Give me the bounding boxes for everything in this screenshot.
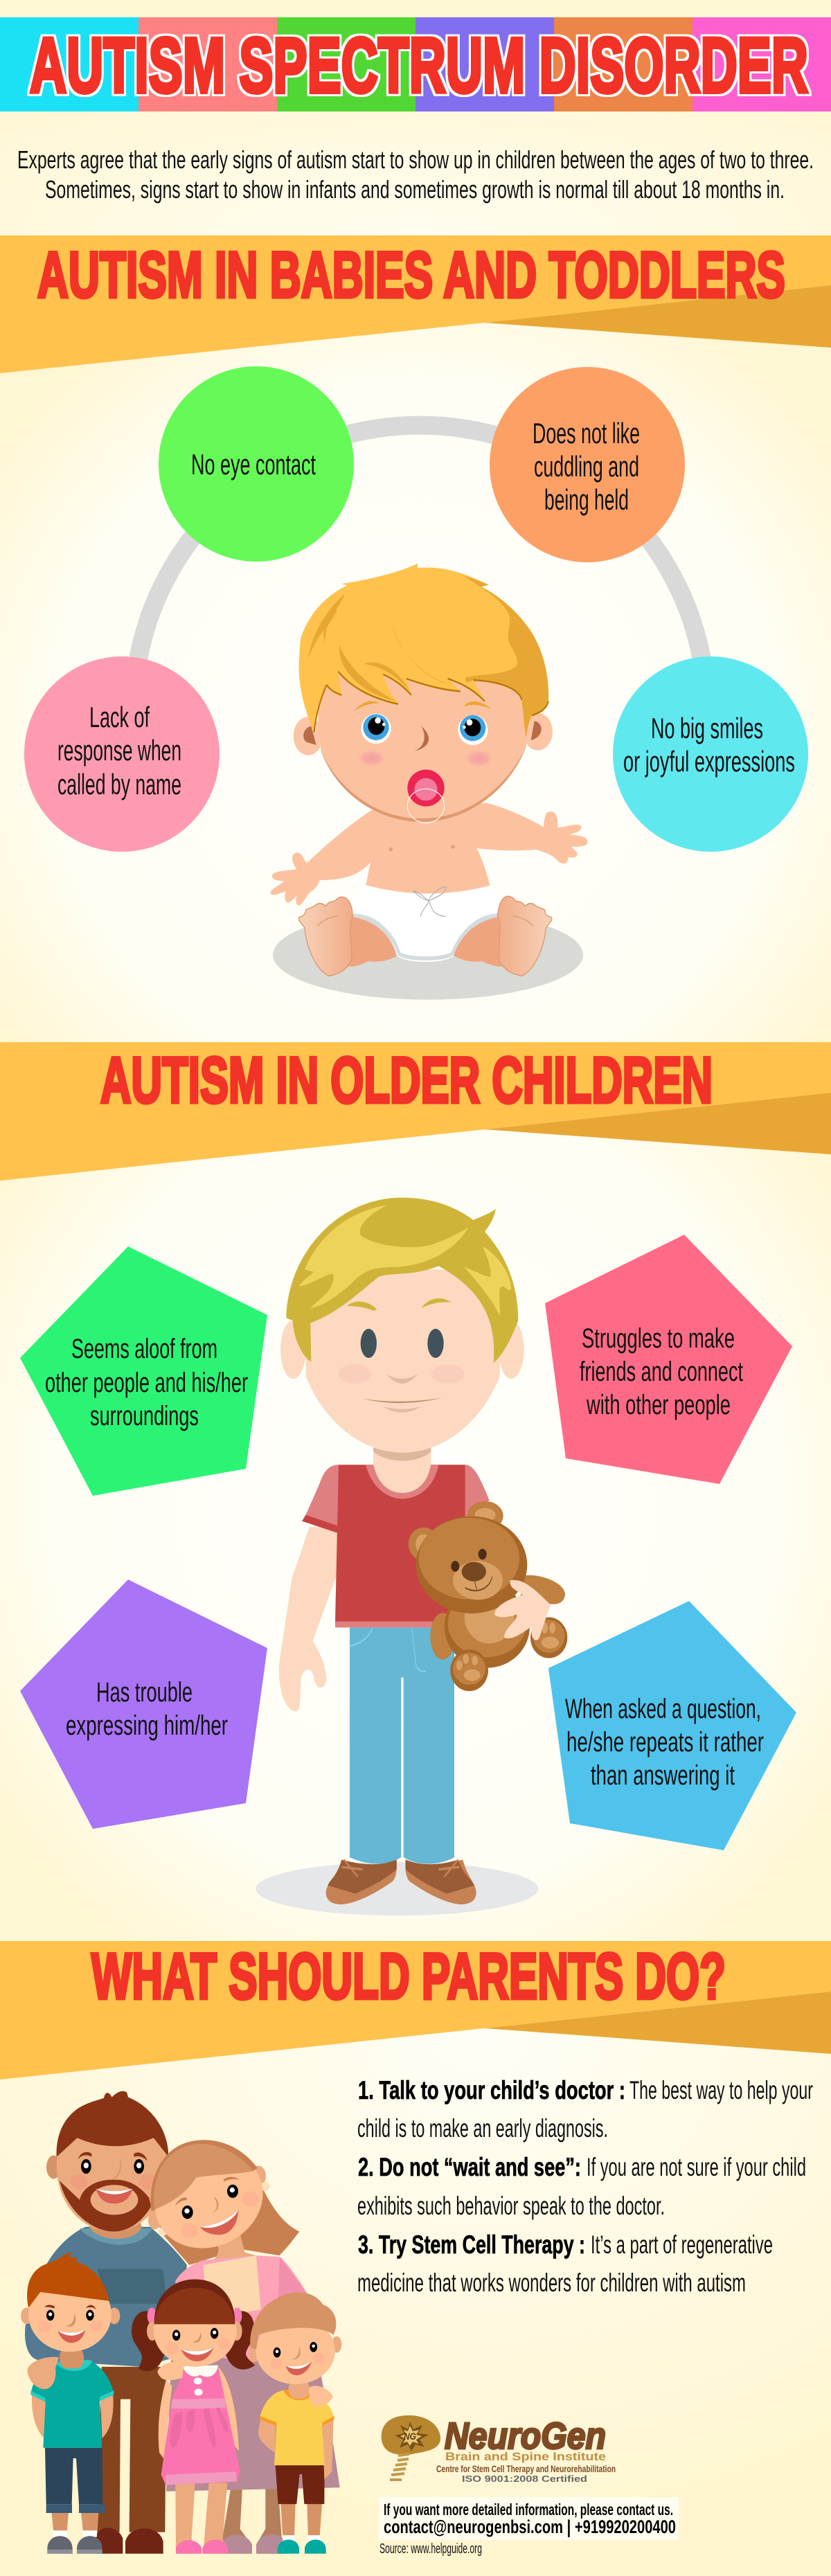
shoes — [326, 1860, 397, 1904]
title band — [0, 17, 831, 111]
mother — [148, 2140, 340, 2554]
feet — [299, 897, 352, 976]
eyebrows — [353, 701, 379, 712]
illustration: baby — [271, 563, 588, 1000]
icon: brain and spine — [382, 2415, 440, 2480]
cheeks — [355, 748, 388, 769]
item 3 — [357, 2230, 773, 2297]
illustration: family — [21, 2091, 341, 2554]
eyebrows — [347, 1298, 452, 1310]
pentagon: seems aloof — [20, 1246, 267, 1496]
hair — [299, 563, 548, 738]
trousers — [350, 1627, 454, 1864]
item 2: exhibits such behavior speak to the doctor. — [357, 2192, 665, 2220]
circle: does not like cuddling: being held — [544, 483, 629, 516]
legs — [344, 917, 397, 967]
nose — [414, 726, 429, 751]
pentagon: trouble expressing: Has trouble — [96, 1677, 193, 1708]
eyes — [361, 1329, 377, 1358]
pentagon: struggles to make friends: with other people — [586, 1390, 731, 1420]
hair — [286, 1197, 518, 1363]
source note: Source: www.helpguide.org — [379, 2541, 482, 2557]
logo: NeuroGen: Centre for Stem Cell Therapy and Neurorehabilitation — [436, 2463, 616, 2474]
pentagon: struggles to make friends — [545, 1235, 792, 1484]
circle: lack of response: response when — [57, 734, 181, 767]
item 1 — [357, 2076, 813, 2143]
circle: no eye contact: No eye contact — [191, 448, 316, 481]
face — [321, 746, 526, 822]
nose and mouth — [386, 1374, 418, 1384]
ears — [294, 717, 323, 755]
connecting arc — [138, 425, 702, 661]
pentagon: seems aloof: Seems aloof from — [71, 1334, 217, 1364]
teddy bear — [409, 1501, 567, 1691]
circle: does not like cuddling: cuddling and — [534, 450, 639, 483]
eyes — [361, 714, 391, 744]
collar and neck — [366, 1465, 438, 1499]
father's hand on shoulder — [27, 2357, 59, 2389]
pentagon: trouble expressing — [20, 1580, 267, 1829]
torso and arms — [271, 803, 588, 905]
contact box: If you want more detailed information, please contact us. — [384, 2501, 673, 2519]
contact box: contact@neurogenbsi.com | +919920200400 — [384, 2516, 676, 2537]
logo: NeuroGen: Brain and Spine Institute — [445, 2450, 606, 2463]
circle: does not like cuddling — [490, 367, 685, 562]
circle: lack of response: Lack of — [89, 701, 150, 733]
logo: NeuroGen: NeuroGen — [445, 2415, 606, 2457]
pentagon: struggles to make friends: friends and connect — [580, 1357, 743, 1387]
shirt — [306, 1465, 339, 1526]
hand holding teddy — [494, 1580, 551, 1640]
contact box — [379, 2497, 679, 2540]
girl in pink dress — [132, 2280, 255, 2554]
nipples — [388, 848, 393, 851]
pentagon: repeats question: than answering it — [591, 1760, 735, 1791]
boy in teal shirt — [21, 2252, 120, 2554]
pentagon: seems aloof: surroundings — [90, 1401, 199, 1431]
boy in yellow shirt — [249, 2292, 341, 2554]
circle: no eye contact — [159, 366, 354, 562]
logo: NeuroGen: ISO 9001:2008 Certified — [462, 2474, 587, 2484]
diaper — [353, 884, 499, 962]
circle: lack of response — [24, 656, 220, 852]
circle: lack of response: called by name — [57, 768, 181, 800]
circle: does not like cuddling: Does not like — [533, 417, 640, 449]
logo: NeuroGen — [382, 2415, 616, 2484]
section banner: babies and toddlers — [0, 235, 831, 373]
pentagon: struggles to make friends: Struggles to make — [582, 1323, 735, 1354]
face — [306, 1269, 500, 1453]
circle: no big smiles — [613, 656, 808, 852]
item 2 — [357, 2153, 806, 2220]
item 1: 1. Talk to your child’s doctor : — [358, 2076, 625, 2104]
section banner: older children — [0, 1042, 831, 1181]
item 3: 3. Try Stem Cell Therapy : — [358, 2230, 585, 2259]
item 1: child is to make an early diagnosis. — [357, 2114, 608, 2143]
circle: no big smiles: No big smiles — [651, 712, 763, 744]
cheeks — [338, 1364, 371, 1384]
father — [25, 2091, 187, 2554]
pentagon: seems aloof: other people and his/her — [45, 1368, 248, 1398]
pentagon: trouble expressing: expressing him/her — [66, 1710, 228, 1741]
icon: brain and spine: NG — [404, 2431, 416, 2442]
list: what parents should do — [357, 2076, 813, 2297]
item 2: 2. Do not “wait and see”: — [358, 2153, 581, 2181]
pacifier — [407, 769, 445, 806]
pentagon: repeats question — [548, 1601, 796, 1850]
ears — [280, 1321, 306, 1379]
intro text — [17, 145, 814, 204]
left arm — [279, 1527, 338, 1712]
hair fringe lines — [314, 672, 548, 733]
section banner: parents — [0, 1940, 831, 2079]
illustration: boy with teddy bear — [256, 1197, 567, 1915]
